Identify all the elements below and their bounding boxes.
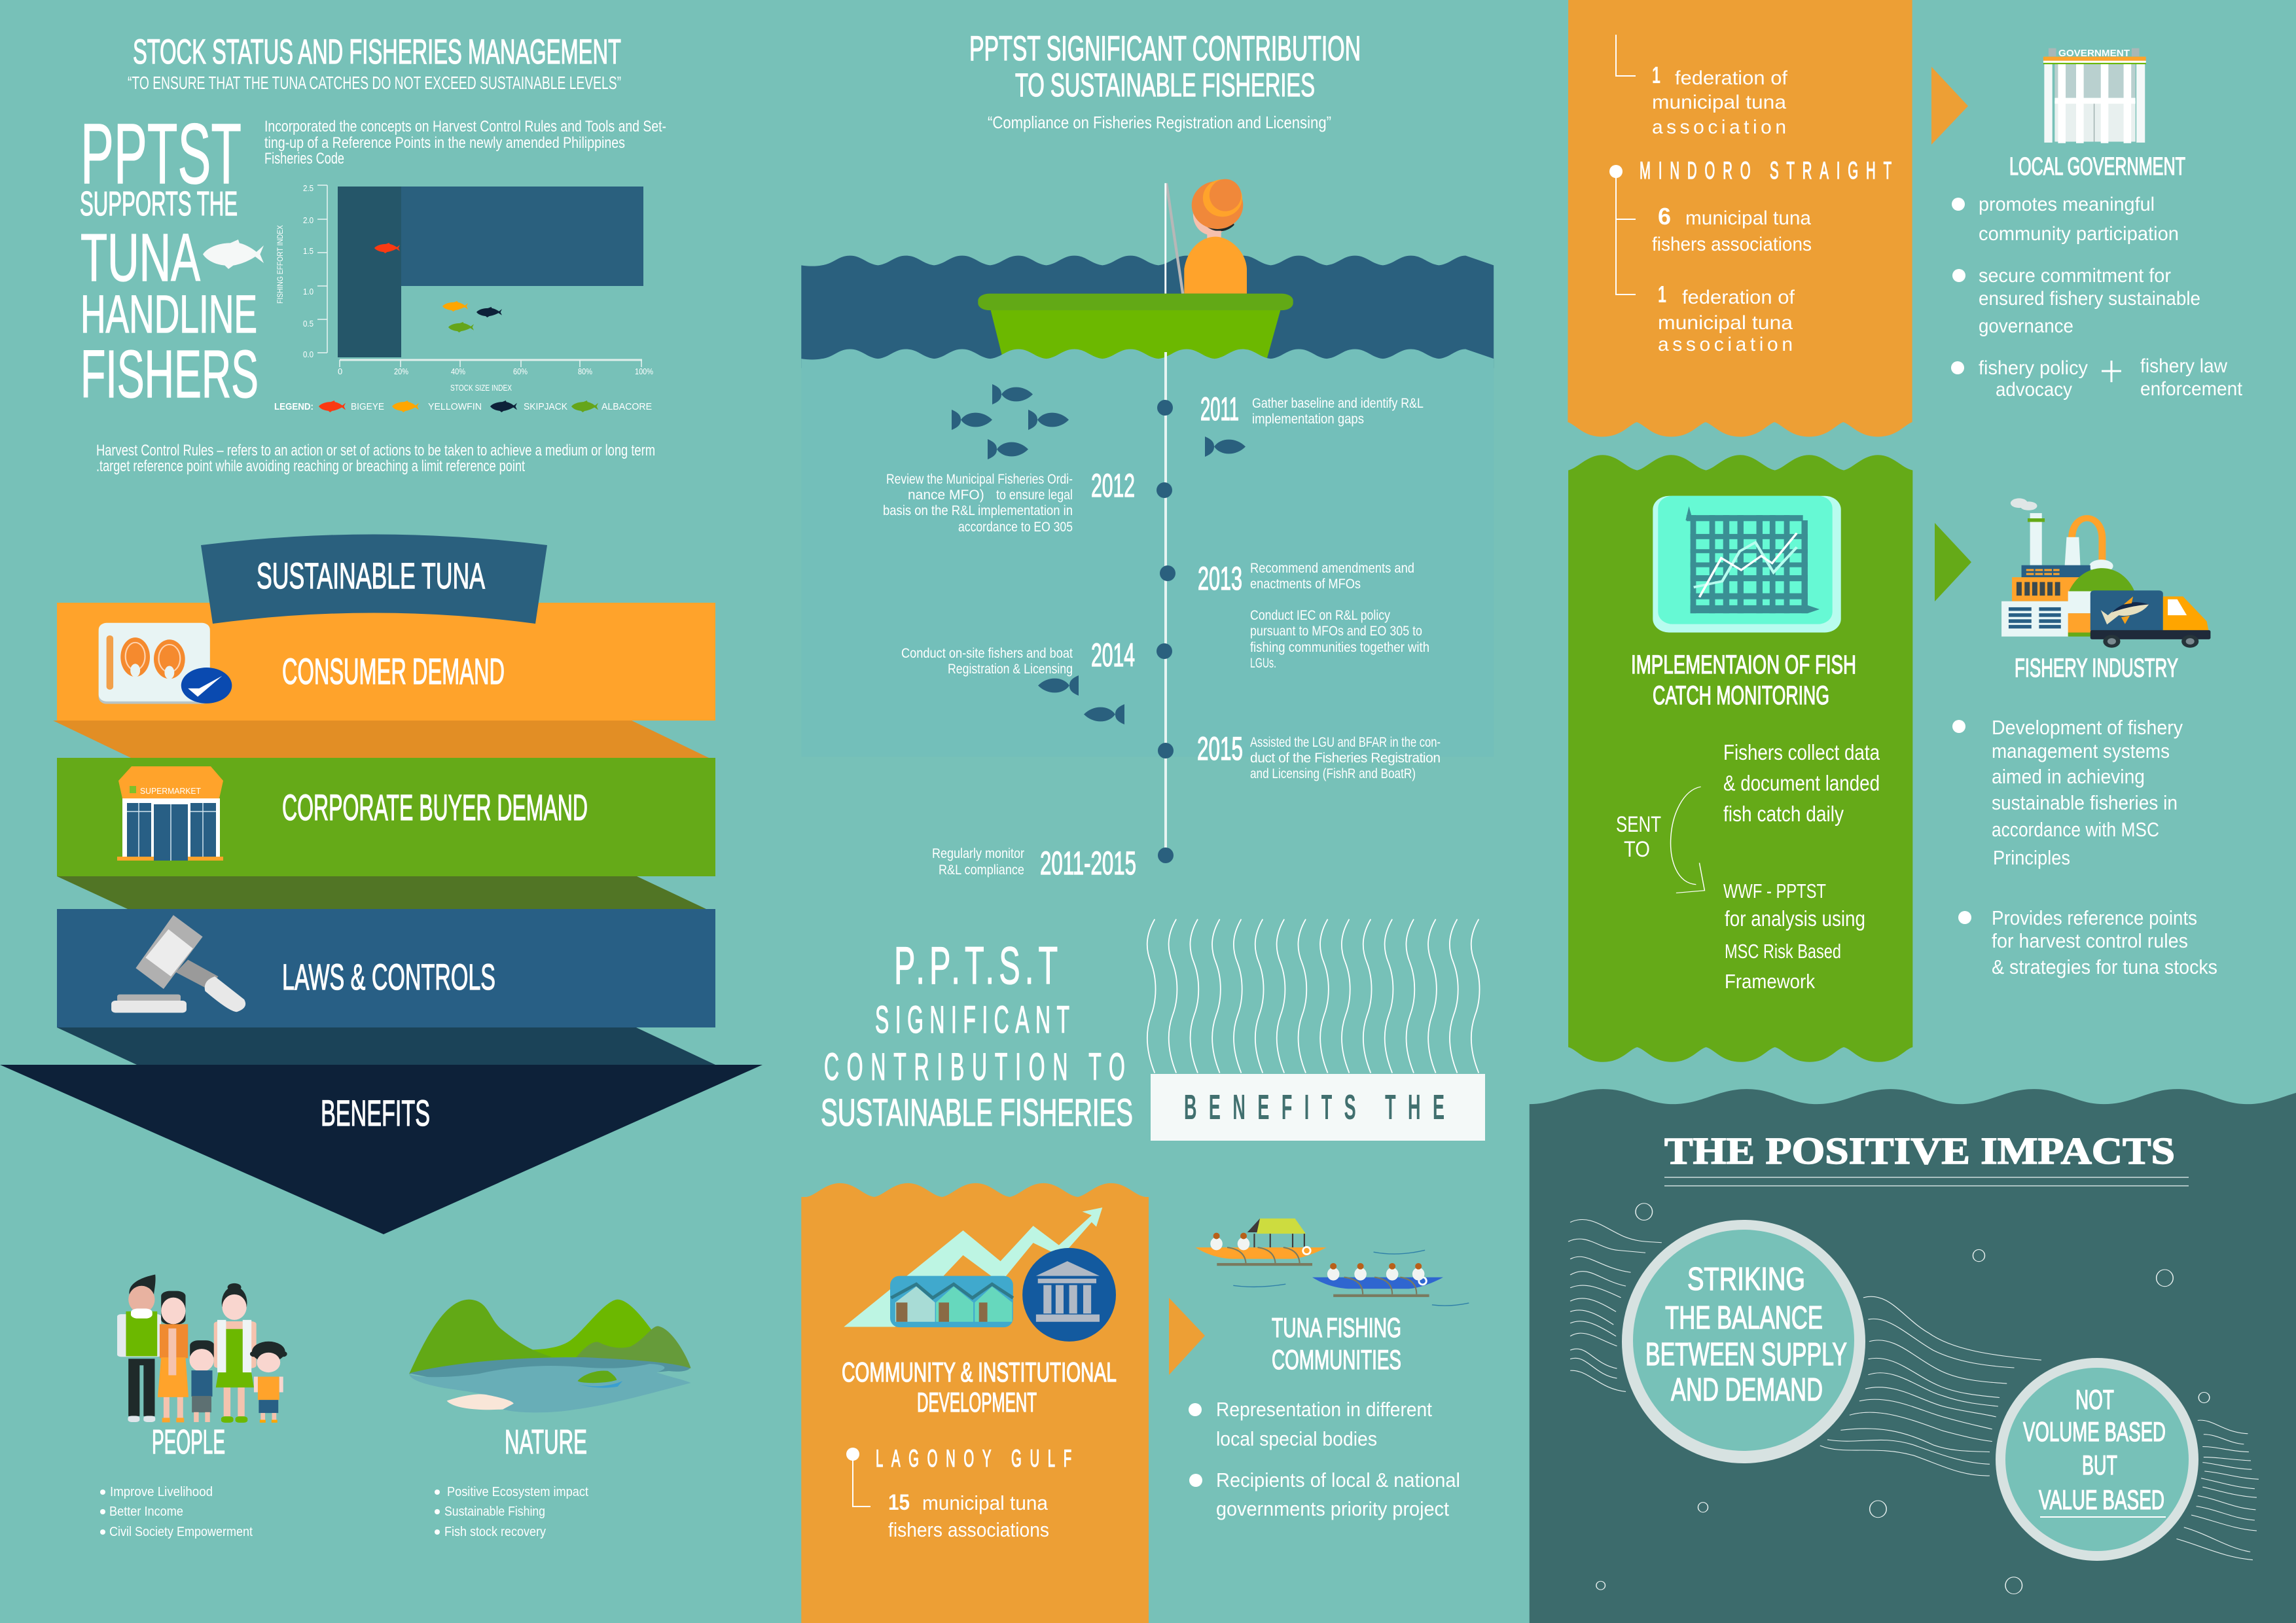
banner: benefits the: BENEFITS THE — [1184, 1088, 1444, 1128]
icon: fishing boats — [1195, 1219, 1469, 1306]
panel: the positive impacts — [1530, 1089, 2296, 1623]
list: local government: fishery law — [2140, 355, 2227, 377]
timeline: 2015: duct of the Fisheries Registration — [1250, 751, 1441, 766]
icon: government building: GOVERNMENT — [2058, 48, 2130, 59]
timeline: 2012: basis on the R&L implementation in — [883, 503, 1073, 518]
text: harvest control concepts: Fisheries Code — [264, 150, 344, 168]
list: local government: enforcement — [2140, 378, 2243, 400]
arrow: orange to tuna fishing communities — [1169, 1298, 1205, 1375]
callout: striking the balance: AND DEMAND — [1671, 1372, 1823, 1408]
timeline: 2013: LGUs. — [1250, 656, 1276, 671]
heading: tuna fishing communities: TUNA FISHING — [1272, 1312, 1401, 1343]
timeline: 2013 — [1198, 560, 1429, 671]
timeline: 2011 — [1200, 391, 1424, 427]
heading: nature: NATURE — [505, 1423, 587, 1461]
text: harvest control rules definition: Harvest Control Rules – refers to an action or set of actions to be taken to achieve a medium or long term — [96, 442, 655, 459]
chart: stock size vs fishing effort: 0.0 — [303, 349, 314, 359]
timeline: 2011: implementation gaps — [1252, 412, 1364, 427]
timeline: 2014: Registration & Licensing — [948, 662, 1073, 677]
icon: data screen — [1653, 496, 1841, 633]
panel: implementation of fish catch monitoring: Framework — [1725, 970, 1815, 993]
chart: stock size vs fishing effort: FISHING EFFORT INDEX — [276, 225, 285, 304]
panel: implementation of fish catch monitoring: for analysis using — [1725, 906, 1865, 931]
band shadows — [53, 721, 715, 1065]
heading: tuna fishing communities: COMMUNITIES — [1272, 1344, 1401, 1375]
list: local government: governance — [1979, 315, 2073, 337]
arrow: green to fishery industry — [1935, 523, 1971, 601]
list: fishery industry: & strategies for tuna stocks — [1992, 955, 2217, 978]
legend — [274, 401, 652, 412]
timeline: 2013: pursuant to MFOs and EO 305 to — [1250, 624, 1422, 639]
callout: not volume based but value based: NOT — [2075, 1384, 2114, 1415]
illustration: fisher on boat on waves — [801, 179, 1494, 757]
chart: stock size vs fishing effort: 1.5 — [303, 246, 314, 256]
icon: white tuna — [203, 240, 264, 269]
heading: PPTST significant contribution: “Compliance on Fisheries Registration and Licensing” — [988, 113, 1331, 132]
panel: mindoro straight: association — [1652, 116, 1786, 138]
panel: implementation of fish catch monitoring — [1568, 455, 1912, 1062]
list: fishery industry: Provides reference points — [1992, 906, 2197, 929]
heading: stock status: “TO ENSURE THAT THE TUNA CATCHES DO NOT EXCEED SUSTAINABLE LEVELS” — [128, 73, 621, 93]
panel: mindoro straight: federation of — [1675, 67, 1788, 89]
timeline: 2013: enactments of MFOs — [1250, 577, 1361, 592]
list: people benefits: Better Income — [109, 1505, 183, 1519]
timeline: 2011-2015: Regularly monitor — [932, 846, 1024, 861]
list: nature benefits — [435, 1485, 588, 1539]
heading: stock status: STOCK STATUS AND FISHERIES MANAGEMENT — [133, 33, 621, 71]
chart: stock size vs fishing effort: 40% — [451, 366, 465, 376]
decorative waves and bubbles — [1568, 1204, 2259, 1594]
panel: mindoro straight: 1 — [1652, 62, 1660, 88]
panel: implementation of fish catch monitoring: & document landed — [1723, 771, 1880, 795]
heading: people: PEOPLE — [152, 1423, 225, 1461]
panel: mindoro straight: 1 — [1658, 281, 1666, 308]
callout: striking the balance: STRIKING — [1687, 1262, 1805, 1297]
chart: stock size vs fishing effort: STOCK SIZE INDEX — [450, 383, 512, 393]
panel: mindoro straight: fishers associations — [1652, 234, 1812, 255]
list: fishery industry: management systems — [1992, 740, 2170, 762]
list: fishery industry: sustainable fisheries in — [1992, 791, 2178, 814]
panel: corporate buyer demand band — [57, 758, 715, 876]
timeline: 2012: to ensure legal — [996, 488, 1073, 503]
callout: not volume based but value based — [1996, 1358, 2198, 1561]
panel: community and institutional development: COMMUNITY & INSTITUTIONAL — [842, 1357, 1117, 1387]
text: harvest control concepts — [264, 118, 666, 168]
panel: community and institutional development: municipal tuna — [922, 1491, 1049, 1514]
panel: implementation of fish catch monitoring: fish catch daily — [1723, 802, 1844, 826]
panel: implementation of fish catch monitoring: TO — [1624, 837, 1650, 862]
title: PPTST supports the tuna handline fishers: TUNA — [81, 220, 200, 295]
legend: ALBACORE — [601, 401, 652, 412]
chart: stock size vs fishing effort: 0 — [338, 366, 342, 376]
timeline: 2011-2015: R&L compliance — [939, 863, 1024, 878]
panel: corporate buyer demand band: CORPORATE BUYER DEMAND — [282, 787, 588, 828]
chart: stock size vs fishing effort: 0.5 — [303, 319, 314, 329]
list: people benefits — [100, 1485, 253, 1539]
list: fishery industry: for harvest control rules — [1992, 929, 2188, 952]
timeline: 2014: Conduct on-site fishers and boat — [901, 646, 1073, 661]
list: tuna fishing communities: local special bodies — [1216, 1427, 1377, 1450]
icon: nature mountains and lake — [409, 1300, 691, 1412]
timeline line and dots — [1157, 352, 1175, 863]
list: tuna fishing communities — [1189, 1398, 1460, 1520]
timeline: 2012: 2012 — [1091, 467, 1135, 504]
list: fishery industry: Principles — [1993, 846, 2070, 869]
list: local government: advocacy — [1996, 379, 2072, 401]
timeline: 2011-2015: 2011-2015 — [1040, 845, 1136, 882]
icon: government building — [2043, 48, 2146, 143]
panel: laws and controls band: LAWS & CONTROLS — [282, 956, 495, 997]
panel: community and institutional development: DEVELOPMENT — [917, 1387, 1037, 1418]
icon: factory and truck — [2001, 498, 2210, 648]
callout: not volume based but value based: VOLUME BASED — [2023, 1416, 2166, 1447]
text: harvest control concepts: Incorporated the concepts on Harvest Control Rules and Tools and Set- — [264, 118, 666, 135]
icon: cutting board with salmon — [99, 623, 232, 704]
legend: YELLOWFIN — [428, 401, 482, 412]
heading: fishery industry: FISHERY INDUSTRY — [2015, 654, 2178, 683]
timeline: 2011: 2011 — [1200, 391, 1239, 427]
panel: implementation of fish catch monitoring: SENT — [1616, 812, 1661, 837]
arrow: benefits triangle — [0, 1065, 762, 1234]
timeline: 2014: 2014 — [1091, 637, 1135, 673]
panel: implementation of fish catch monitoring: Fishers collect data — [1723, 740, 1880, 764]
timeline: 2012 — [883, 467, 1135, 535]
heading: P.P.T.S.T significant contribution: CONTRIBUTION TO — [824, 1046, 1125, 1088]
list: fishery industry: Development of fishery — [1992, 716, 2183, 739]
timeline: 2015: and Licensing (FishR and BoatR) — [1250, 766, 1416, 781]
icon: gavel — [111, 915, 245, 1013]
timeline: 2014 — [901, 637, 1135, 677]
panel: community and institutional development: 15 — [888, 1490, 910, 1515]
list: nature benefits: Sustainable Fishing — [444, 1505, 545, 1519]
timeline: 2013: fishing communities together with — [1250, 640, 1429, 655]
heading: stock status — [128, 33, 621, 93]
panel: laws and controls band — [57, 909, 715, 1027]
panel: implementation of fish catch monitoring: MSC Risk Based — [1725, 940, 1841, 963]
panel: mindoro straight: federation of — [1682, 287, 1795, 308]
panel: community and institutional development: fishers associations — [888, 1518, 1049, 1541]
legend: SKIPJACK — [524, 401, 567, 412]
chart: stock size vs fishing effort: 100% — [635, 366, 653, 376]
list: nature benefits: Positive Ecosystem impact — [447, 1485, 588, 1499]
heading: local government: LOCAL GOVERNMENT — [2009, 153, 2185, 181]
panel: consumer demand band: CONSUMER DEMAND — [282, 651, 505, 692]
arrow: orange to local government — [1931, 67, 1968, 145]
panel: mindoro straight — [1568, 0, 1912, 437]
chart: stock size vs fishing effort: 80% — [578, 366, 592, 376]
legend: BIGEYE — [351, 401, 384, 412]
timeline: 2011: Gather baseline and identify R&L — [1252, 396, 1424, 411]
list: fishery industry: accordance with MSC — [1992, 818, 2159, 841]
list: tuna fishing communities: governments priority project — [1216, 1497, 1449, 1520]
title: PPTST supports the tuna handline fishers: FISHERS — [81, 336, 259, 412]
heading: PPTST significant contribution: TO SUSTAINABLE FISHERIES — [1015, 67, 1315, 103]
chart: stock size vs fishing effort: 60% — [513, 366, 528, 376]
callout: striking the balance — [1622, 1220, 1865, 1463]
panel: implementation of fish catch monitoring: CATCH MONITORING — [1653, 681, 1829, 710]
icon: family — [117, 1274, 287, 1423]
timeline: 2015: 2015 — [1197, 730, 1243, 767]
panel: mindoro straight: MINDORO STRAIGHT — [1640, 158, 1892, 185]
chart: stock size vs fishing effort: 1.0 — [303, 287, 314, 296]
list: local government — [1951, 194, 2243, 401]
panel: community and institutional development — [801, 1183, 1149, 1623]
list: people benefits: Improve Livelihood — [110, 1485, 213, 1499]
list: local government: fishery policy — [1979, 357, 2088, 379]
arrow: benefits triangle: BENEFITS — [321, 1092, 430, 1133]
heading: PPTST significant contribution: PPTST SIGNIFICANT CONTRIBUTION — [969, 29, 1361, 68]
timeline: 2012: nance MFO) — [908, 488, 984, 503]
list: fishery industry — [1952, 716, 2217, 978]
icon: supermarket — [117, 766, 223, 861]
list: local government: secure commitment for — [1979, 265, 2171, 287]
icon: supermarket: SUPERMARKET — [140, 786, 201, 796]
list: local government: community participation — [1979, 223, 2179, 245]
title: PPTST supports the tuna handline fishers: PPTST — [81, 105, 242, 202]
list: local government: promotes meaningful — [1979, 194, 2155, 215]
timeline: 2011-2015 — [932, 845, 1136, 882]
heading: the positive impacts: THE POSITIVE IMPACTS — [1664, 1130, 2175, 1172]
ribbon: sustainable tuna: SUSTAINABLE TUNA — [257, 555, 485, 596]
banner: benefits the — [1151, 1074, 1485, 1141]
panel: mindoro straight: municipal tuna — [1685, 207, 1811, 229]
timeline: 2012: Review the Municipal Fisheries Ordi- — [886, 472, 1073, 487]
panel: implementation of fish catch monitoring: IMPLEMENTAION OF FISH — [1631, 651, 1856, 679]
timeline: 2013: Conduct IEC on R&L policy — [1250, 608, 1390, 623]
callout: not volume based but value based: BUT — [2082, 1450, 2117, 1480]
ribbon: sustainable tuna — [201, 534, 547, 624]
title: PPTST supports the tuna handline fishers: SUPPORTS THE — [80, 185, 238, 223]
chart: stock size vs fishing effort — [276, 183, 653, 393]
heading: P.P.T.S.T significant contribution: SUSTAINABLE FISHERIES — [821, 1092, 1133, 1134]
heading: P.P.T.S.T significant contribution: SIGNIFICANT — [875, 999, 1069, 1041]
callout: striking the balance: THE BALANCE — [1665, 1300, 1823, 1336]
panel: mindoro straight: municipal tuna — [1652, 92, 1786, 113]
panel: mindoro straight: municipal tuna — [1658, 312, 1793, 334]
heading: P.P.T.S.T significant contribution: P.P.T.S.T — [894, 936, 1058, 995]
chart: stock size vs fishing effort: 2.5 — [303, 183, 314, 193]
list: nature benefits: Fish stock recovery — [444, 1525, 546, 1539]
panel: mindoro straight: association — [1658, 334, 1793, 355]
title: PPTST supports the tuna handline fishers: HANDLINE — [81, 285, 257, 344]
panel: mindoro straight: 6 — [1658, 203, 1671, 230]
callout: striking the balance: BETWEEN SUPPLY — [1645, 1337, 1847, 1372]
timeline: 2013: 2013 — [1198, 560, 1242, 597]
arrow: sent to curve — [1671, 787, 1704, 893]
decorative wavy lines — [1147, 919, 1480, 1073]
heading: PPTST significant contribution — [969, 29, 1361, 132]
text: harvest control rules definition: .target reference point while avoiding reaching or breaching a limit reference point — [96, 457, 525, 475]
panel: consumer demand band — [57, 603, 715, 721]
text: harvest control concepts: ting-up of a Reference Points in the newly amended Philippines — [264, 134, 625, 152]
text: harvest control rules definition — [96, 442, 655, 475]
callout: not volume based but value based: VALUE BASED — [2039, 1484, 2164, 1515]
list: people benefits: Civil Society Empowerment — [109, 1525, 253, 1539]
list: local government: ensured fishery sustainable — [1979, 288, 2200, 310]
timeline: 2015 — [1197, 730, 1441, 781]
title: PPTST supports the tuna handline fishers — [80, 105, 259, 412]
list: fishery industry: aimed in achieving — [1992, 765, 2145, 788]
list: tuna fishing communities: Recipients of local & national — [1216, 1469, 1460, 1491]
timeline: 2015: Assisted the LGU and BFAR in the con- — [1250, 735, 1441, 750]
icon: growth arrow, houses and institution — [844, 1207, 1116, 1342]
heading: P.P.T.S.T significant contribution — [821, 936, 1133, 1134]
timeline: 2013: Recommend amendments and — [1250, 561, 1414, 576]
chart: stock size vs fishing effort: 20% — [394, 366, 408, 376]
list: tuna fishing communities: Representation in different — [1216, 1398, 1432, 1421]
heading: tuna fishing communities — [1272, 1312, 1401, 1375]
chart: stock size vs fishing effort: 2.0 — [303, 215, 314, 225]
legend: LEGEND: — [274, 401, 314, 412]
icons: small fish — [952, 384, 1246, 724]
panel: community and institutional development: LAGONOY GULF — [876, 1446, 1071, 1472]
panel: implementation of fish catch monitoring: WWF - PPTST — [1723, 880, 1826, 902]
timeline: 2012: accordance to EO 305 — [958, 520, 1073, 535]
